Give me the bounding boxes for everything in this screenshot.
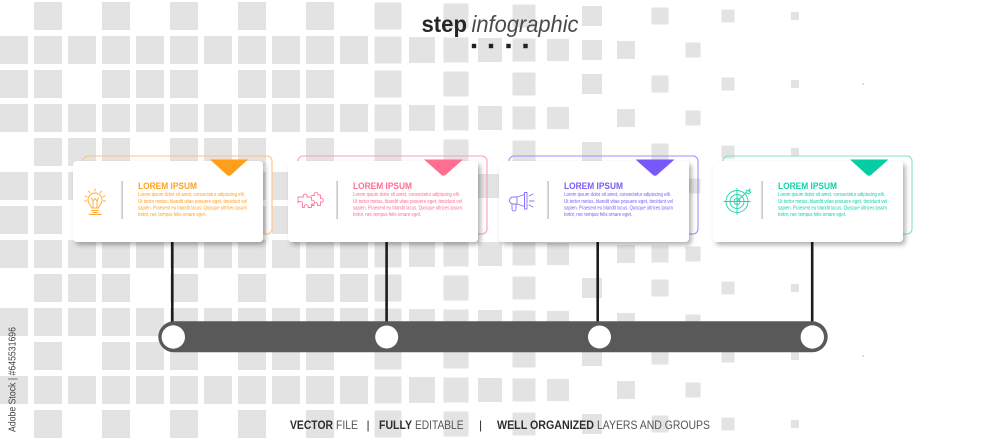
step 2 outline: [298, 156, 487, 234]
step 3 text: [564, 192, 673, 218]
step 4 marker: [850, 160, 888, 176]
footer text: LAYERS AND GROUPS: [597, 418, 710, 432]
step 3 text: tortor, nec tempus felis ornare eget.: [564, 212, 632, 218]
panel: step 2: [288, 156, 487, 242]
panel: step 1: [73, 156, 272, 242]
timeline node 3: [588, 326, 611, 348]
divider: [337, 181, 338, 219]
step 2 text: [353, 192, 462, 218]
divider: [122, 181, 123, 219]
divider: [548, 181, 549, 219]
step 4 text: [778, 192, 887, 218]
title dots: [472, 44, 528, 48]
footer text: WELL ORGANIZED: [497, 418, 594, 432]
step 4 heading: LOREM IPSUM: [778, 181, 837, 192]
step 4 text: sapien. Praesent eu blandit lacus. Quisque ultrices ipsum: [778, 205, 887, 211]
step 1 text: [138, 192, 247, 218]
footer text: FILE: [336, 418, 358, 432]
step 3 heading: LOREM IPSUM: [564, 181, 623, 192]
timeline node 4: [801, 325, 824, 349]
step 3 text: Lorem ipsum dolor sit amet, consectetur adipiscing elit.: [564, 192, 671, 198]
step 3 text: sapien. Praesent eu blandit lacus. Quisque ultrices ipsum: [564, 205, 673, 211]
step 3 marker: [636, 160, 674, 176]
step 1 text: sapien. Praesent eu blandit lacus. Quisque ultrices ipsum: [138, 205, 247, 211]
icon: light bulb: [84, 189, 106, 214]
step 3 outline: [509, 156, 698, 234]
footer text: FULLY: [379, 418, 412, 432]
footer text: EDITABLE: [415, 418, 464, 432]
step 3 card: [499, 161, 689, 242]
step 2 text: Ut tortor metus, blandit vitae posuere eget, tincidunt vel: [353, 199, 462, 205]
divider: [762, 181, 763, 219]
icon: megaphone: [510, 192, 534, 211]
footer text: |: [366, 418, 370, 432]
step 4 text: Lorem ipsum dolor sit amet, consectetur adipiscing elit.: [778, 192, 885, 198]
step 1 card: [73, 161, 263, 242]
panel: step 3: [499, 156, 698, 242]
title: step: [422, 11, 467, 37]
step 4 outline: [723, 156, 912, 234]
step 2 card: [288, 161, 478, 242]
footer text: [290, 418, 710, 432]
step 4 text: Ut tortor metus, blandit vitae posuere eget, tincidunt vel: [778, 199, 887, 205]
footer text: |: [479, 418, 482, 432]
step 3 text: Ut tortor metus, blandit vitae posuere eget, tincidunt vel: [564, 199, 673, 205]
footer text: VECTOR: [290, 418, 333, 432]
step 4 text: tortor, nec tempus felis ornare eget.: [778, 212, 846, 218]
step 1 heading: LOREM IPSUM: [138, 181, 197, 192]
side stock label: Adobe Stock | #645531696: [8, 327, 18, 432]
step 2 text: Lorem ipsum dolor sit amet, consectetur adipiscing elit.: [353, 192, 460, 198]
step 2 marker: [424, 160, 463, 176]
step 1 text: Ut tortor metus, blandit vitae posuere eget, tincidunt vel: [138, 199, 247, 205]
step 1 text: tortor, nec tempus felis ornare eget.: [138, 212, 206, 218]
step 2 text: sapien. Praesent eu blandit lacus. Quisque ultrices ipsum: [353, 205, 462, 211]
timeline bar: [158, 321, 828, 352]
title: [422, 11, 579, 37]
step 4 card: [713, 161, 903, 242]
step 1 outline: [83, 156, 272, 234]
icon: target: [724, 188, 751, 214]
panel: step 4: [713, 156, 912, 242]
icon: puzzle: [298, 192, 323, 208]
step 1 marker: [210, 160, 248, 176]
step 2 heading: LOREM IPSUM: [353, 181, 412, 192]
step 1 text: Lorem ipsum dolor sit amet, consectetur adipiscing elit.: [138, 192, 245, 198]
connector lines: [172, 240, 812, 323]
step 2 text: tortor, nec tempus felis ornare eget.: [353, 212, 421, 218]
timeline node 1: [162, 325, 185, 349]
title: infographic: [472, 11, 579, 37]
timeline node 2: [375, 326, 398, 348]
